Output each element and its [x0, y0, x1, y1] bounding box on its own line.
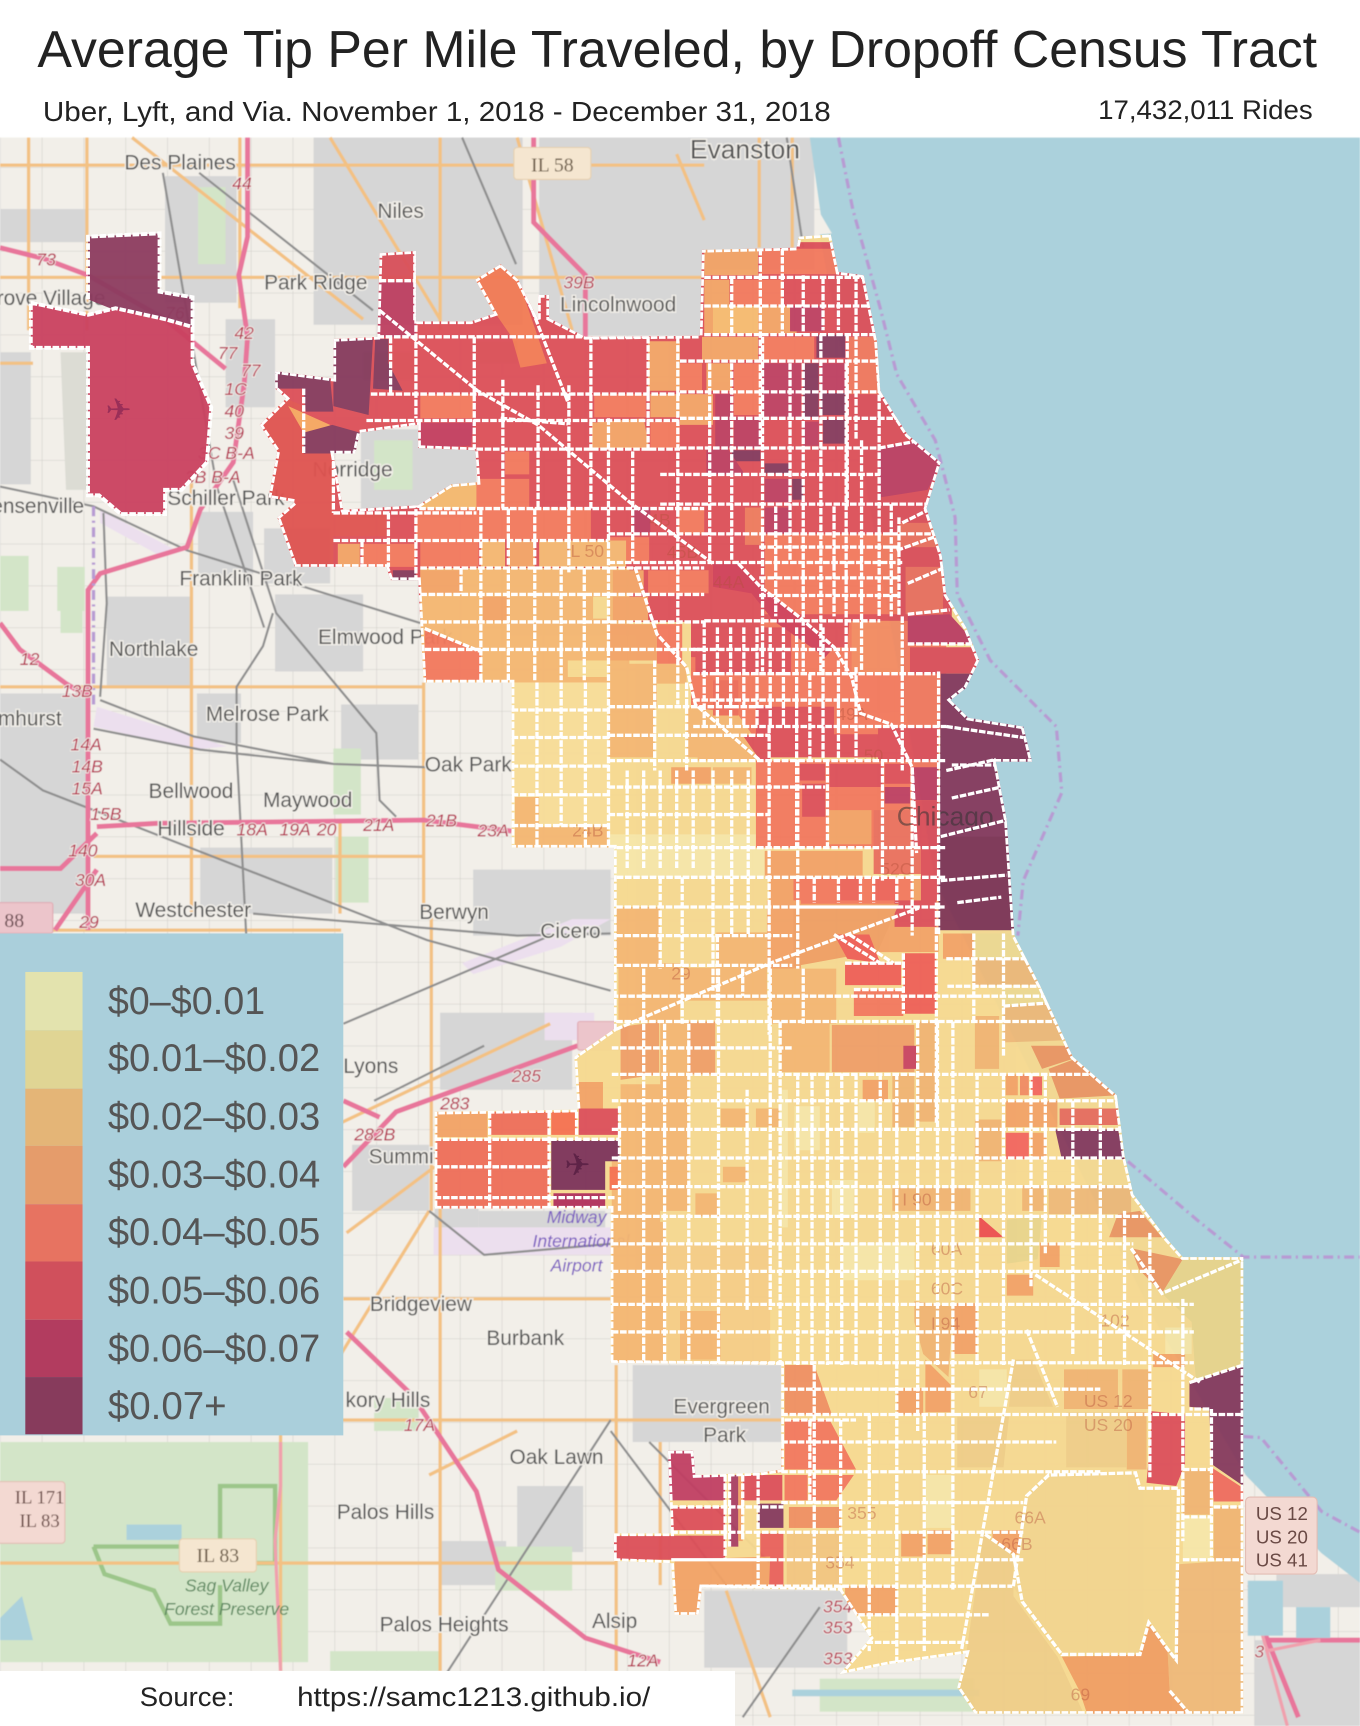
- map place names: Palos Heights: [380, 1613, 509, 1636]
- icon: midway airport plane: ✈: [564, 1148, 590, 1183]
- legend labels: $0.07+: [108, 1385, 227, 1428]
- exit numbers: 73: [36, 249, 56, 269]
- map place names: Park: [703, 1424, 747, 1447]
- map labels visible through tracts: 24B: [572, 821, 603, 841]
- parks: [0, 187, 974, 1712]
- map labels visible through tracts: 50: [864, 746, 884, 766]
- exit numbers: 3C B-A: [198, 443, 255, 463]
- map place names: Westchester: [135, 899, 251, 922]
- map labels visible through tracts: 29: [671, 964, 691, 984]
- exit numbers: [20, 173, 1264, 1671]
- exit numbers: 13B: [62, 681, 93, 701]
- shield: US 12 / US 20 / US 41: [1246, 1497, 1317, 1574]
- map labels visible through tracts: 69: [1071, 1685, 1090, 1705]
- exit numbers: 14B: [72, 757, 103, 777]
- tract fill: city-wide base: [434, 234, 1244, 1714]
- exit numbers: 354: [823, 1597, 853, 1617]
- map labels visible through tracts: I 90: [902, 1189, 932, 1209]
- map place names: Cicero: [540, 920, 601, 943]
- map place names: Evanston: [690, 135, 800, 165]
- exit numbers: 39: [224, 423, 244, 443]
- lake michigan: [810, 138, 1360, 1583]
- map place names: Hillside: [157, 817, 225, 840]
- exit numbers: 44: [232, 173, 252, 193]
- map place names: kory Hills: [346, 1389, 430, 1412]
- state boundary: [94, 138, 1360, 1532]
- map labels visible through tracts: 45B: [667, 542, 698, 562]
- map place names: Elmwood Park: [318, 626, 453, 649]
- shield: IL 171 / IL 83: IL 83: [19, 1511, 60, 1532]
- map labels visible through tracts: 67: [968, 1382, 988, 1402]
- map place names: Oak Park: [425, 754, 512, 777]
- exit numbers: 12A: [627, 1651, 658, 1671]
- map labels visible through tracts: Chicago: [897, 802, 994, 832]
- airfield: [61, 352, 88, 490]
- shield: IL 83: [179, 1539, 256, 1572]
- major roads: [0, 138, 792, 1717]
- map place names: Bellwood: [149, 780, 233, 803]
- shield: IL 58: IL 58: [531, 155, 574, 177]
- map place names: Schiller Park: [167, 487, 285, 510]
- forest preserve label: Forest Preserve: [164, 1599, 289, 1619]
- shield: IL 58: [514, 148, 591, 179]
- map labels visible through tracts: 44A: [713, 572, 745, 592]
- map place names: Park Ridge: [264, 271, 367, 295]
- legend labels: $0.06–$0.07: [108, 1328, 320, 1371]
- tract boundaries: north: [304, 249, 977, 853]
- shield: IL 171 / IL 83: IL 171: [15, 1488, 64, 1509]
- exit numbers: 42: [234, 323, 254, 343]
- exit numbers: 39B: [563, 272, 595, 292]
- exit numbers: 15A: [72, 779, 103, 799]
- shield: US 12 / US 20 / US 41: US 20: [1256, 1526, 1308, 1547]
- map place names: Melrose Park: [206, 703, 329, 726]
- shield: 88: [0, 903, 53, 933]
- map labels visible through tracts: 354: [825, 1553, 855, 1573]
- tract: downtown and north lakefront: [939, 674, 1034, 930]
- source footer: [0, 1671, 735, 1726]
- map place names: Palos Hills: [337, 1501, 434, 1524]
- tracts: o'hare airport: ✈: [106, 392, 131, 427]
- small lakes: [0, 1525, 1330, 1696]
- map place names: Bridgeview: [370, 1293, 473, 1316]
- exit numbers: 20: [316, 819, 337, 839]
- lavender rail yards: [94, 510, 615, 1255]
- map place names: Franklin Park: [179, 568, 303, 591]
- midway airport label: Airport: [550, 1255, 604, 1275]
- legend panel: [0, 933, 343, 1435]
- map labels visible through tracts: 66A: [1014, 1507, 1046, 1527]
- map labels visible through tracts: 52C: [880, 859, 913, 879]
- legend labels: $0–$0.01: [108, 980, 265, 1023]
- exit numbers: 12: [20, 649, 40, 669]
- map place names: Summit: [369, 1146, 440, 1169]
- tracts: far north and northwest: [253, 242, 952, 622]
- map labels visible through tracts: US 12: [1084, 1391, 1133, 1411]
- legend labels: $0.05–$0.06: [108, 1269, 320, 1312]
- exit numbers: 29: [78, 912, 99, 932]
- map place names: Alsip: [592, 1610, 637, 1633]
- exit numbers: 19A: [279, 819, 311, 839]
- source label: Source:: [140, 1682, 234, 1712]
- exit numbers: 140: [68, 840, 98, 860]
- exit numbers: 17A: [404, 1415, 435, 1435]
- legend labels: [108, 980, 320, 1428]
- source url: https://samc1213.github.io/: [297, 1682, 651, 1712]
- legend labels: $0.01–$0.02: [108, 1037, 320, 1080]
- map labels visible through tracts: I 94: [931, 1314, 960, 1334]
- exit numbers: 18A: [237, 819, 268, 839]
- exit numbers: 282B: [353, 1124, 396, 1144]
- map place names: Des Plaines: [124, 152, 236, 175]
- map place names: [0, 135, 800, 1636]
- map labels visible through tracts: 102: [1100, 1310, 1130, 1330]
- legend labels: $0.03–$0.04: [108, 1154, 320, 1197]
- map labels visible through tracts: 4B: [649, 510, 671, 530]
- exit numbers: 21B: [425, 811, 457, 831]
- shield: IL 171 / IL 83: [0, 1482, 65, 1543]
- map place names: Evergreen: [673, 1395, 770, 1418]
- forest preserve outline: [94, 1486, 275, 1624]
- shield: US 12 / US 20 / US 41: US 12: [1256, 1503, 1308, 1524]
- exit numbers: 76: [165, 303, 185, 323]
- shield: US 12 / US 20 / US 41: US 41: [1256, 1549, 1308, 1570]
- map place names: Maywood: [263, 789, 352, 812]
- exit numbers: 283: [439, 1094, 470, 1114]
- midway airport label: International: [533, 1231, 630, 1251]
- rail lines: [0, 138, 820, 1717]
- map labels visible through tracts: US 20: [1084, 1415, 1133, 1435]
- exit numbers: 285: [511, 1066, 541, 1086]
- map labels visible through tracts: 60A: [931, 1239, 962, 1259]
- census tract choropleth: [220, 220, 1265, 1726]
- exit numbers: 353: [823, 1648, 853, 1668]
- map labels visible through tracts: 66B: [1001, 1534, 1033, 1554]
- city outline: [260, 234, 1243, 1714]
- exit numbers: 14A: [70, 735, 102, 755]
- subtitle: Uber, Lyft, and Via. November 1, 2018 - December 31, 2018: [43, 96, 831, 127]
- exit numbers: 40: [224, 401, 244, 421]
- map place names: Oak Lawn: [509, 1446, 604, 1469]
- exit numbers: 353: [823, 1618, 853, 1638]
- shield: IL 83: IL 83: [197, 1545, 239, 1567]
- legend labels: $0.02–$0.03: [108, 1095, 320, 1138]
- exit numbers: 30A: [75, 870, 106, 890]
- tract boundaries: central: [512, 616, 1023, 1123]
- map labels visible through tracts: 355: [847, 1503, 877, 1523]
- tracts: south lakefront: [780, 933, 1243, 1714]
- tract boundaries: south: [435, 933, 1243, 1714]
- map labels visible through tracts: [566, 510, 1133, 1705]
- tracts: west side: [420, 540, 770, 1001]
- ride count: 17,432,011 Rides: [1098, 95, 1313, 125]
- map place names: Northlake: [109, 638, 198, 661]
- tracts: central and near west: [652, 507, 1034, 1024]
- map place names: Norridge: [312, 459, 393, 482]
- exit numbers: 21A: [362, 815, 394, 835]
- tracts: southwest and midway: [436, 963, 917, 1615]
- map labels visible through tracts: 49A: [836, 704, 868, 724]
- exit numbers: 1C: [224, 379, 247, 399]
- exit numbers: 3B B-A: [185, 467, 241, 487]
- exit numbers: 15B: [90, 804, 122, 824]
- map place names: Niles: [377, 200, 424, 223]
- map place names: Lyons: [343, 1055, 398, 1078]
- forest preserve label: Sag Valley: [185, 1576, 268, 1596]
- tracts: o'hare airport: [31, 233, 211, 514]
- legend labels: $0.04–$0.05: [108, 1211, 320, 1254]
- exit numbers: 77: [218, 343, 239, 363]
- exit numbers: 23A: [477, 821, 509, 841]
- map place names: Lincolnwood: [560, 294, 676, 317]
- map place names: Burbank: [486, 1327, 565, 1350]
- exit numbers: 77: [241, 360, 262, 380]
- title: Average Tip Per Mile Traveled, by Dropoff Census Tract: [37, 20, 1317, 78]
- legend swatches: [25, 972, 83, 1434]
- exit numbers: 3: [1254, 1642, 1264, 1662]
- map labels visible through tracts: IL 50: [566, 541, 604, 561]
- shield: I 55: [578, 1022, 627, 1050]
- map place names: Berwyn: [419, 901, 489, 924]
- map labels visible through tracts: 60C: [931, 1278, 963, 1299]
- midway airport label: Midway: [547, 1207, 606, 1227]
- shield: 88: 88: [4, 910, 24, 932]
